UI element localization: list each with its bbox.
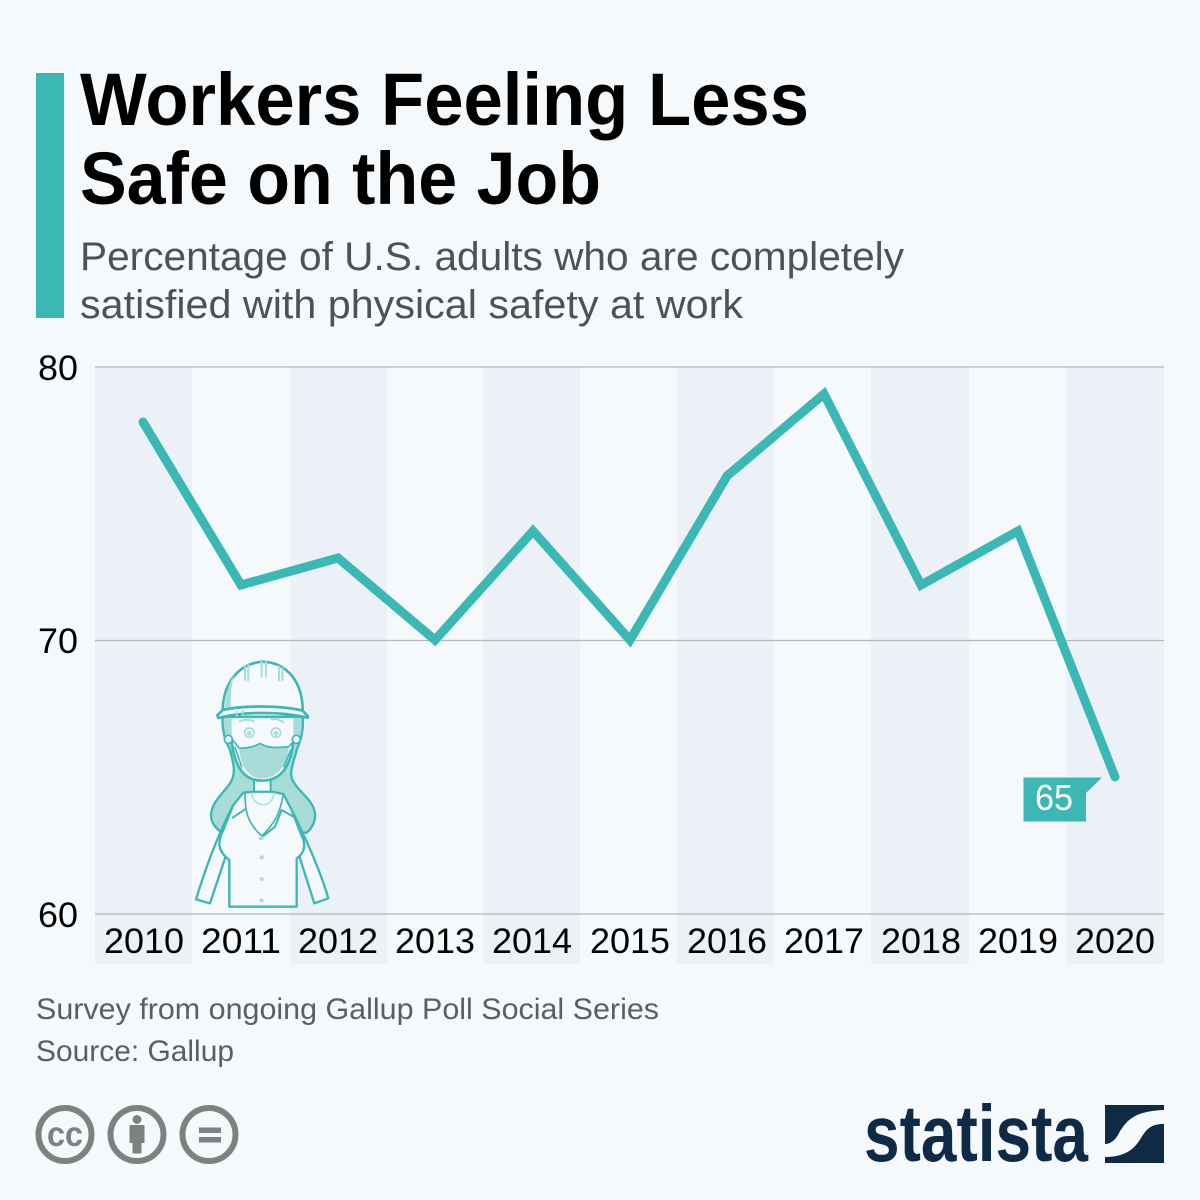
grid lines [95, 367, 1164, 914]
x axis labels [104, 922, 1155, 961]
footnote: Source: Gallup [36, 1035, 234, 1068]
x axis labels: 2011 [201, 922, 281, 961]
x axis labels: 2013 [395, 922, 475, 961]
y axis labels [38, 349, 78, 935]
subtitle [80, 235, 904, 327]
title accent bar [36, 73, 64, 318]
x axis labels: 2010 [104, 922, 184, 961]
title: Safe on the Job [80, 137, 601, 220]
icon: no derivatives [182, 1108, 236, 1161]
title [80, 58, 809, 220]
x axis labels: 2014 [492, 922, 572, 961]
icon: creative commons [38, 1108, 92, 1161]
subtitle: satisfied with physical safety at work [80, 283, 744, 327]
x axis labels: 2020 [1075, 922, 1155, 961]
x axis labels: 2015 [590, 922, 670, 961]
statista logo mark [1105, 1105, 1164, 1163]
title: Workers Feeling Less [80, 58, 809, 141]
callout: 2020 value: 65 [1035, 777, 1073, 818]
icon: worker with hard hat and mask [196, 662, 328, 907]
y axis labels: 80 [38, 349, 78, 388]
x axis labels: 2017 [784, 922, 864, 961]
icon: attribution [110, 1108, 164, 1161]
alternating year bands [95, 367, 1164, 964]
icon: creative commons: cc [47, 1115, 83, 1154]
x axis labels: 2018 [881, 922, 961, 961]
statista wordmark: statista [864, 1089, 1088, 1178]
y axis labels: 70 [38, 622, 78, 661]
footnote [36, 993, 659, 1068]
line chart [143, 394, 1115, 777]
x axis labels: 2019 [978, 922, 1058, 961]
subtitle: Percentage of U.S. adults who are completely [80, 235, 904, 279]
callout: 2020 value [1024, 777, 1102, 822]
y axis labels: 60 [38, 896, 78, 935]
x axis labels: 2012 [298, 922, 378, 961]
x axis labels: 2016 [687, 922, 767, 961]
footnote: Survey from ongoing Gallup Poll Social Series [36, 993, 659, 1026]
